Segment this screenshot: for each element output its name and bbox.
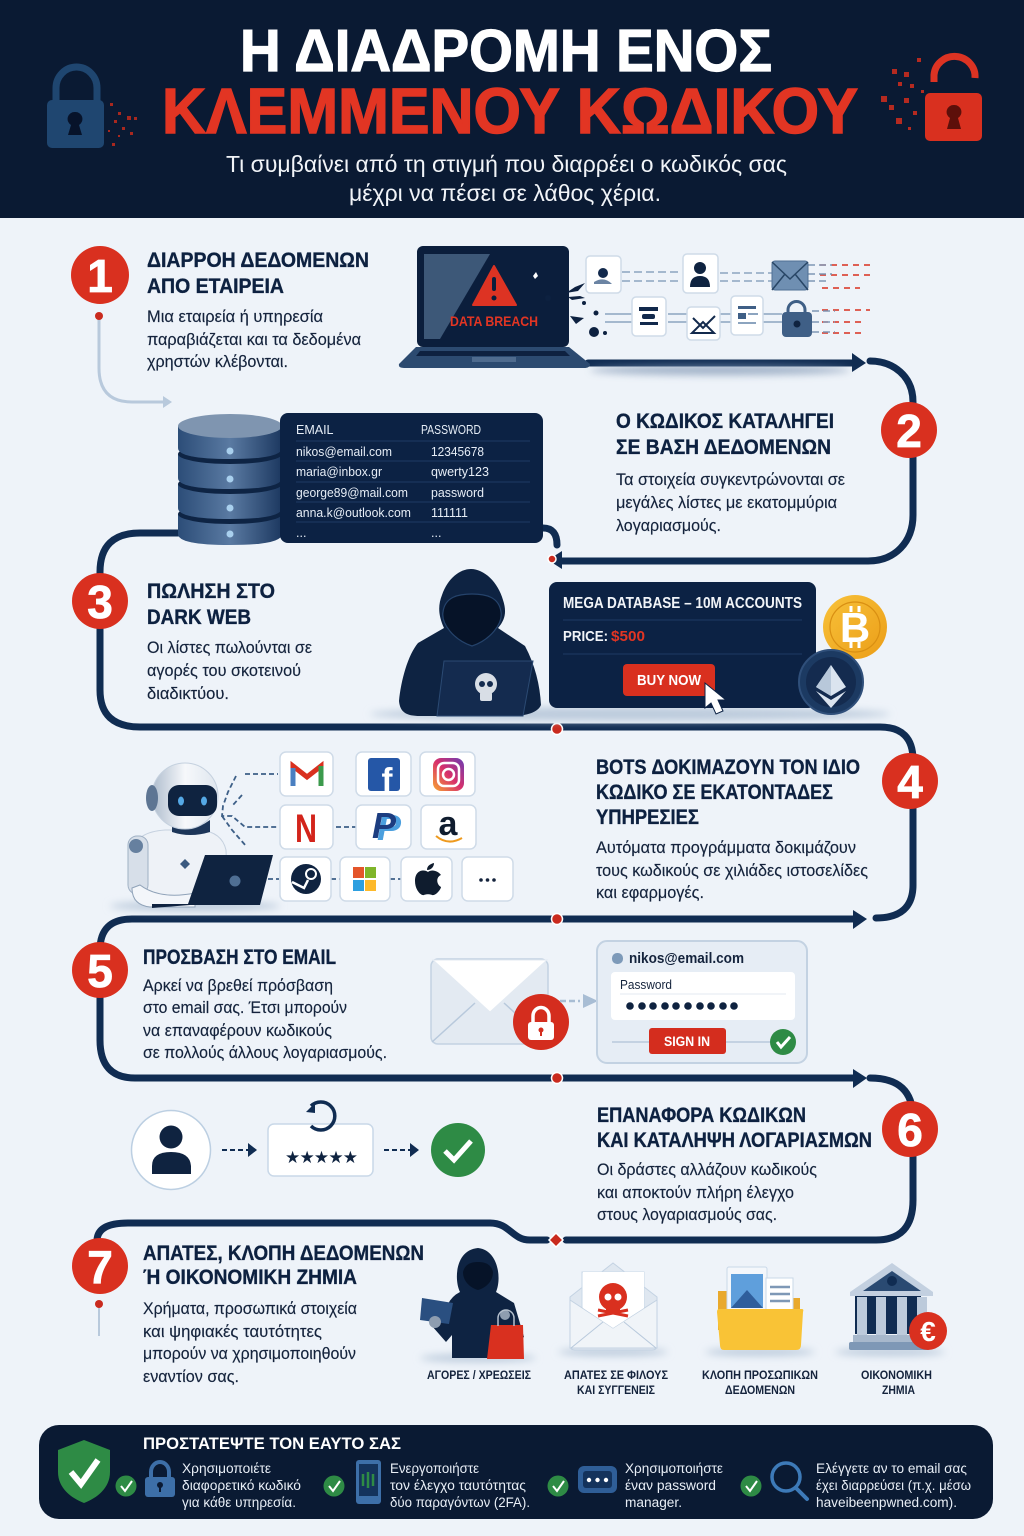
tip 1 text: Χρησιμοποιέτε: [182, 1461, 271, 1476]
step 1 text: χρηστών κλέβονται.: [147, 353, 288, 371]
step 6 text: και αποκτούν πλήρη έλεγχο: [597, 1184, 794, 1202]
step 7 text: [143, 1242, 424, 1386]
credentials table: [280, 413, 543, 543]
connector dots: [548, 555, 563, 1247]
step 7 text: εναντίον σας.: [143, 1368, 239, 1386]
icon: mail: [772, 261, 808, 290]
credentials table: nikos@email.com: [296, 445, 392, 459]
icon: more: [462, 857, 513, 901]
consequence: bank financial loss: €: [920, 1316, 936, 1347]
tip 2 text: τον έλεγχο ταυτότητας: [390, 1478, 526, 1493]
label: [702, 1370, 818, 1397]
step 2 number: 2: [896, 405, 922, 457]
panel: protect yourself: [39, 1425, 993, 1519]
step 6 number: 6: [897, 1104, 923, 1156]
step 7 text: και ψηφιακές ταυτότητες: [143, 1323, 322, 1341]
step 4 number: [882, 753, 938, 809]
tip 3 check: [548, 1476, 568, 1496]
subtitle: Τι συμβαίνει από τη στιγμή που διαρρέει ο κωδικός σας: [226, 151, 787, 177]
marketplace panel: $500: [611, 628, 645, 645]
icon: apple: [401, 857, 452, 901]
step 1 text: [147, 249, 369, 371]
arrow: [222, 1143, 257, 1157]
marketplace panel: PRICE:: [563, 628, 608, 645]
icon: netflix: N: [295, 807, 317, 851]
step 3 text: Οι λίστες πωλούνται σε: [147, 639, 313, 657]
step 7 text: Ή ΟΙΚΟΝΟΜΙΚΗ ΖΗΜΙΑ: [143, 1266, 357, 1289]
step 2 text: λογαριασμούς.: [616, 517, 721, 535]
icon: tip 4 magnifier: [772, 1463, 807, 1499]
light connector step 7: [98, 1304, 100, 1336]
step 7 text: ΑΠΑΤΕΣ, ΚΛΟΠΗ ΔΕΔΟΜΕΝΩΝ: [143, 1242, 424, 1265]
icon: facebook: f: [382, 761, 394, 798]
step 4 text: [596, 756, 868, 902]
label: ΑΠΑΤΕΣ ΣΕ ΦΙΛΟΥΣ: [564, 1370, 668, 1382]
step 1 number: [71, 246, 129, 304]
step 3 text: αγορές του σκοτεινού: [147, 662, 301, 680]
login card: [597, 941, 807, 1063]
icon: instagram: [420, 752, 475, 796]
subtitle: [226, 151, 787, 206]
step 2 number: [881, 402, 937, 458]
tip 1 text: διαφορετικό κωδικό: [182, 1478, 301, 1493]
step 7 number: [72, 1238, 128, 1294]
step 1 text: παραβιάζεται και τα δεδομένα: [147, 331, 361, 349]
step 6 text: ΚΑΙ ΚΑΤΑΛΗΨΗ ΛΟΓΑΡΙΑΣΜΩΝ: [597, 1129, 872, 1152]
icon: tip 2 phone: [356, 1460, 381, 1504]
icon: netflix: [280, 805, 333, 851]
step 1 text: ΔΙΑΡΡΟΗ ΔΕΔΟΜΕΝΩΝ: [147, 249, 369, 272]
title line 2: ΚΛΕΜΜΕΝΟΥ ΚΩΔΙΚΟΥ: [162, 75, 858, 147]
credentials table: ...: [296, 526, 306, 540]
icon: key document: [586, 256, 621, 293]
tip 1 text: για κάθε υπηρεσία.: [182, 1495, 296, 1510]
icon: bitcoin: B: [840, 604, 870, 651]
label: ΑΓΟΡΕΣ / ΧΡΕΩΣΕΙΣ: [427, 1370, 531, 1382]
step 3 text: DARK WEB: [147, 606, 251, 629]
step 4 text: και εφαρμογές.: [596, 884, 704, 902]
icon: closed blue lock: [47, 67, 137, 148]
icon: document 2: [731, 296, 763, 335]
header band: [0, 0, 1024, 218]
icon: gmail: [280, 752, 333, 796]
credentials table: 111111: [431, 506, 468, 520]
icon: document 1: [632, 297, 666, 336]
step 2 text: Τα στοιχεία συγκεντρώνονται σε: [616, 471, 846, 489]
icon: password reset card: ★★★★★: [285, 1148, 358, 1168]
step 1 text: ΑΠΟ ΕΤΑΙΡΕΙΑ: [147, 275, 284, 298]
buy now button: [623, 664, 715, 696]
tip 4 text: έχει διαρρεύσει (π.χ. μέσω: [816, 1478, 971, 1493]
consequence: stolen files folder: [702, 1267, 818, 1397]
step 5 text: ΠΡΟΣΒΑΣΗ ΣΤΟ EMAIL: [143, 946, 336, 969]
icon: open mail: [687, 307, 720, 340]
dashed bot connections: [222, 774, 401, 879]
icon: green check circle: [431, 1123, 485, 1177]
step 1 number: 1: [87, 250, 113, 302]
shadow under hacker and panel: [370, 707, 890, 721]
label: ΖΗΜΙΑ: [882, 1385, 915, 1397]
tip 4 text: Ελέγγετε αν το email σας: [816, 1461, 967, 1476]
step 6 text: στους λογαριασμούς σας.: [597, 1206, 777, 1224]
icon: paypal: P: [377, 807, 402, 848]
consequence: purchases: [420, 1248, 536, 1382]
icon: laptop data breach: DATA BREACH: [450, 313, 538, 329]
step 1 text: Μια εταιρεία ή υπηρεσία: [147, 308, 323, 326]
step 5 number: 5: [87, 945, 113, 997]
step 5 text: να επαναφέρουν κωδικούς: [143, 1022, 332, 1040]
step 3 text: διαδικτύου.: [147, 685, 229, 703]
tip 1 check: [116, 1476, 136, 1496]
step 4 text: BOTS ΔΟΚΙΜΑΖΟΥΝ ΤΟΝ ΙΔΙΟ: [596, 756, 860, 779]
step 7 text: μπορούν να χρησιμοποιηθούν: [143, 1345, 356, 1363]
step 3 number: [72, 573, 128, 629]
tip 2 check: [324, 1476, 344, 1496]
tip 4 text: [816, 1461, 971, 1510]
icon: person card: [683, 254, 718, 293]
light connector step 1: [99, 316, 167, 402]
credentials table: maria@inbox.gr: [296, 465, 382, 479]
title line 1: Η ΔΙΑΔΡΟΜΗ ΕΝΟΣ: [240, 18, 772, 84]
marketplace panel: [549, 582, 816, 714]
label: [564, 1370, 668, 1397]
step 6 text: [597, 1104, 872, 1224]
password dots: [626, 1002, 738, 1010]
sign in button: [649, 1028, 726, 1054]
label: ΚΛΟΠΗ ΠΡΟΣΩΠΙΚΩΝ: [702, 1370, 818, 1382]
credentials table: anna.k@outlook.com: [296, 506, 411, 520]
consequence: scam email: [558, 1263, 668, 1397]
label: [861, 1370, 932, 1397]
icon: cursor: [705, 683, 726, 714]
step 2 text: μεγάλες λίστες με εκατομμύρια: [616, 494, 837, 512]
buy now button: BUY NOW: [637, 672, 702, 689]
data flow icons: [586, 254, 870, 340]
icon: green shield: [58, 1440, 110, 1503]
icon: hooded hacker with laptop: [399, 569, 541, 716]
icon: tip 1 lock: [145, 1462, 175, 1497]
credentials table: PASSWORD: [421, 423, 481, 437]
tip 2 text: Ενεργοποιήστε: [390, 1461, 479, 1476]
step 4 text: Αυτόματα προγράμματα δοκιμάζουν: [596, 839, 856, 857]
step 4 number: 4: [897, 756, 923, 808]
icon: open red lock: [881, 56, 982, 141]
credentials table: EMAIL: [296, 423, 334, 437]
tip 2 text: δύο παραγόντων (2FA).: [390, 1495, 530, 1510]
icon: bitcoin: [823, 595, 887, 659]
step 5 text: Αρκεί να βρεθεί πρόσβαση: [143, 977, 333, 995]
step 4 text: ΚΩΔΙΚΟ ΣΕ ΕΚΑΤΟΝΤΑΔΕΣ: [596, 781, 833, 804]
tip 1 text: [182, 1461, 301, 1510]
icon: person circle: [132, 1110, 210, 1190]
panel heading: ΠΡΟΣΤΑΤΕΨΤΕ ΤΟΝ ΕΑΥΤΟ ΣΑΣ: [143, 1434, 401, 1453]
icon: database cylinder: [178, 414, 282, 545]
step 4 text: τους κωδικούς σε χιλιάδες ιστοσελίδες: [596, 862, 868, 880]
step 3 text: [147, 580, 313, 703]
marketplace panel: MEGA DATABASE – 10M ACCOUNTS: [563, 595, 802, 612]
icon: ethereum: [799, 650, 863, 714]
icon: laptop data breach: [399, 246, 850, 375]
icon: facebook: [356, 752, 411, 798]
icon: amazon: a: [439, 805, 459, 843]
credentials table: 12345678: [431, 445, 484, 459]
arrow: [384, 1143, 419, 1157]
icon: green check: [770, 1029, 796, 1055]
flow path: connector line through steps: [95, 312, 913, 1336]
step 6 text: Οι δράστες αλλάζουν κωδικούς: [597, 1161, 817, 1179]
icon: robot with laptop: [110, 763, 280, 911]
login card: nikos@email.com: [629, 950, 744, 967]
label: ΚΑΙ ΣΥΓΓΕΝΕΙΣ: [577, 1385, 655, 1397]
icon: paypal: P: [372, 805, 397, 846]
step 2 text: ΣΕ ΒΑΣΗ ΔΕΔΟΜΕΝΩΝ: [616, 436, 831, 459]
step 5 text: σε πολλούς άλλους λογαριασμούς.: [143, 1044, 387, 1062]
icon: envelope with red lock: [431, 959, 598, 1050]
consequence: bank financial loss: [835, 1263, 947, 1397]
arrowheads: [548, 353, 867, 1088]
icon: small lock: [782, 302, 812, 337]
tip 2 text: [390, 1461, 530, 1510]
label: ΟΙΚΟΝΟΜΙΚΗ: [861, 1370, 932, 1382]
tip 3 text: Χρησιμοποιήστε: [625, 1461, 723, 1476]
credentials table: qwerty123: [431, 465, 489, 479]
tip 3 text: manager.: [625, 1495, 682, 1510]
tip 4 check: [740, 1476, 762, 1496]
step 2 text: Ο ΚΩΔΙΚΟΣ ΚΑΤΑΛΗΓΕΙ: [616, 410, 834, 433]
step 3 number: 3: [87, 576, 113, 628]
label: ΔΕΔΟΜΕΝΩΝ: [725, 1385, 795, 1397]
icon: microsoft: [340, 857, 390, 901]
step 2 text: [616, 410, 846, 535]
credentials table: ...: [431, 526, 441, 540]
app icon grid: [280, 752, 513, 901]
sign in button: SIGN IN: [664, 1034, 710, 1049]
step 7 number: 7: [87, 1241, 113, 1293]
step 6 text: ΕΠΑΝΑΦΟΡΑ ΚΩΔΙΚΩΝ: [597, 1104, 806, 1127]
tip 4 text: haveibeenpwned.com).: [816, 1495, 957, 1510]
icon: amazon: [421, 805, 476, 849]
credentials table: password: [431, 486, 484, 500]
icon: tip 3 password manager: [578, 1466, 617, 1493]
step 7 text: Χρήματα, προσωπικά στοιχεία: [143, 1300, 357, 1318]
step 6 number: [882, 1101, 938, 1157]
step 3 text: ΠΩΛΗΣΗ ΣΤΟ: [147, 580, 275, 603]
icon: paypal: [356, 805, 411, 849]
tip 3 text: έναν password: [625, 1478, 716, 1493]
subtitle: μέχρι να πέσει σε λάθος χέρια.: [349, 180, 661, 206]
step 5 number: [72, 942, 128, 998]
tip 3 text: [625, 1461, 723, 1510]
login card: Password: [620, 978, 672, 992]
step 5 text: στο email σας. Έτσι μπορούν: [143, 999, 347, 1017]
icon: steam: [280, 857, 331, 901]
icon: password reset card: [268, 1102, 373, 1176]
step 4 text: ΥΠΗΡΕΣΙΕΣ: [596, 806, 699, 829]
credentials table: george89@mail.com: [296, 486, 408, 500]
step 5 text: [143, 946, 387, 1062]
